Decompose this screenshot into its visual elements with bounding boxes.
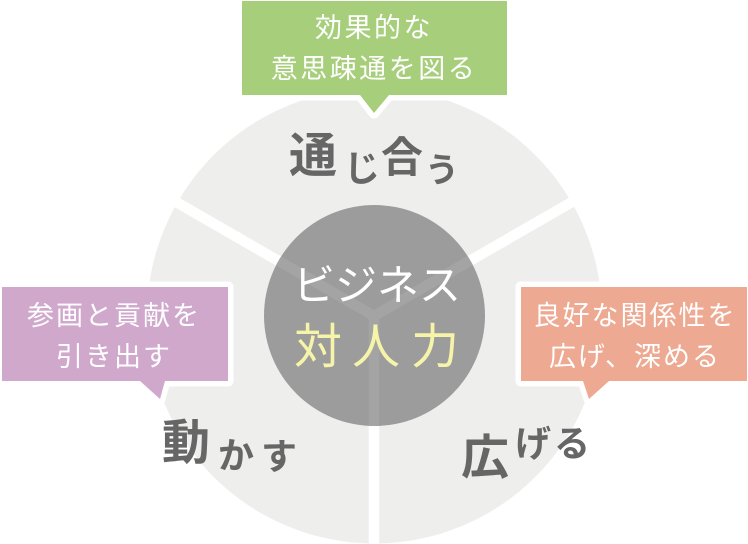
pie chart: three segments: [147, 88, 602, 544]
callout text: green: 効果的な: [315, 13, 433, 43]
label: 通じ合う: 合: [381, 134, 423, 181]
label: 通じ合う: う: [425, 152, 459, 190]
callout text: orange: 広げ、深める: [549, 342, 721, 372]
label: 通じ合う: 通: [289, 130, 337, 183]
callout: green: [242, 1, 507, 113]
label: 動かす: す: [261, 436, 297, 477]
label: 通じ合う: [289, 130, 459, 190]
callout text: purple: 参画と貢献を: [27, 301, 201, 331]
title line: ビジネス: ビジネス: [293, 262, 461, 309]
callout: orange: [521, 287, 747, 399]
label: 動かす: [162, 417, 297, 477]
label: 動かす: か: [218, 435, 254, 476]
label: 広げる: 広: [461, 432, 509, 485]
callout text: orange: 良好な関係性を: [534, 301, 736, 331]
callout: purple: [0, 281, 228, 399]
title line: 対人力: 対人力: [294, 321, 459, 374]
label: 広げる: [461, 423, 590, 485]
label: 広げる: げ: [515, 423, 551, 464]
callout text: purple: 引き出す: [56, 342, 172, 372]
callout text: green: 意思疎通を図る: [271, 54, 477, 84]
center circle: title: [264, 205, 485, 430]
label: 広げる: る: [554, 423, 590, 464]
label: 通じ合う: じ: [344, 148, 380, 189]
label: 動かす: 動: [162, 417, 210, 470]
